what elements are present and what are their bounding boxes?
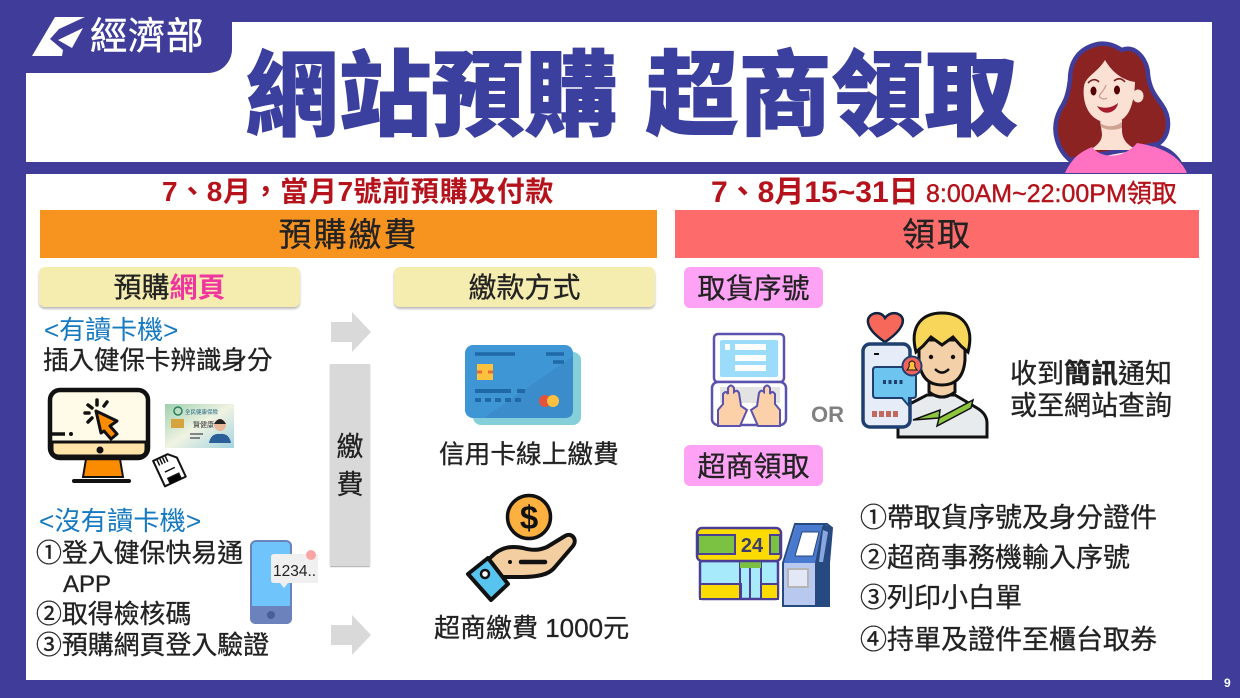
heading: pickup date: 7、8月15~31日 8:00AM~22:00PM領取 [711, 176, 1177, 209]
payment bar: 繳 [336, 432, 364, 462]
section header: pickup: 領取 [902, 216, 972, 253]
section header: pickup [675, 210, 1199, 258]
icon: computer with cursor [48, 388, 150, 483]
section header: prepurchase and payment: 預購繳費 [278, 216, 418, 253]
text: pickup steps: ③列印小白單 [860, 583, 1022, 613]
logo text: 經濟部 [90, 15, 204, 57]
icon: memory card [152, 453, 187, 488]
icon: hand receiving coin [466, 494, 577, 602]
text: pickup steps: ①帶取貨序號及身分證件 [860, 503, 1157, 533]
icon: health insurance card: 全民健康保險 [185, 408, 219, 416]
text: online credit card payment: 信用卡線上繳費 [439, 441, 619, 469]
icon: woman avatar [1053, 41, 1187, 173]
arrow: bottom right [331, 615, 371, 655]
text: steps without card reader [36, 540, 269, 660]
text: with card reader: <有讀卡機> [44, 315, 178, 345]
tag: convenience store pickup [684, 445, 823, 486]
title: 網站預購 超商領取 [246, 44, 1018, 148]
text: steps without card reader: APP [63, 570, 111, 598]
icon: convenience store and kiosk [696, 523, 833, 607]
tag: prepurchase web page: 預購網頁 [113, 272, 226, 303]
icon: convenience store and kiosk: 24 [741, 535, 764, 557]
arrow: top right [331, 312, 371, 352]
tag: prepurchase web page [39, 267, 300, 307]
text: steps without card reader: ①登入健保快易通 [36, 540, 243, 568]
tag: pickup serial number: 取貨序號 [697, 273, 810, 304]
tag: convenience store pickup: 超商領取 [697, 451, 810, 482]
text: steps without card reader: ③預購網頁登入驗證 [36, 632, 269, 660]
text: insert NHI card: 插入健保卡辨識身分 [43, 347, 273, 375]
text: SMS notification or website query: 收到簡訊通知 [1010, 359, 1172, 389]
icon: health insurance card [165, 404, 234, 448]
panel: main white area [26, 174, 1212, 680]
text: convenience store payment: 超商繳費 1000元 [434, 613, 629, 643]
icon: laptop with hands [710, 332, 788, 427]
icon: phone with code message: 1234.. [273, 563, 316, 580]
heading: prepurchase date: 7、8月，當月7號前預購及付款 [162, 176, 554, 207]
icon: health insurance card: 賢健康 [193, 420, 214, 429]
text: without card reader: <沒有讀卡機> [39, 506, 201, 536]
logo tab: ministry of economic affairs [0, 0, 232, 73]
icon: person with phone notification [861, 312, 988, 438]
payment bar: 費 [336, 470, 364, 500]
text: SMS notification or website query: 或至網站查詢 [1010, 391, 1172, 421]
tag: payment method [394, 267, 655, 307]
text: OR: OR [811, 402, 844, 427]
icon: hand receiving coin: $ [520, 499, 538, 536]
page number: 9 [1224, 676, 1231, 690]
text: pickup steps: ②超商事務機輸入序號 [860, 543, 1130, 573]
text: steps without card reader: ②取得檢核碼 [36, 601, 191, 629]
icon: credit card [465, 345, 581, 425]
section header: prepurchase and payment [40, 210, 657, 258]
tag: pickup serial number [684, 267, 823, 308]
payment bar [330, 364, 370, 566]
icon: phone with code message [250, 540, 318, 624]
text: SMS notification or website query [1010, 359, 1172, 421]
icon: ministry logo [32, 17, 85, 56]
text: pickup steps [860, 503, 1157, 655]
text: pickup steps: ④持單及證件至櫃台取券 [860, 625, 1157, 655]
tag: payment method: 繳款方式 [468, 272, 580, 303]
panel: header white area [26, 22, 1212, 162]
